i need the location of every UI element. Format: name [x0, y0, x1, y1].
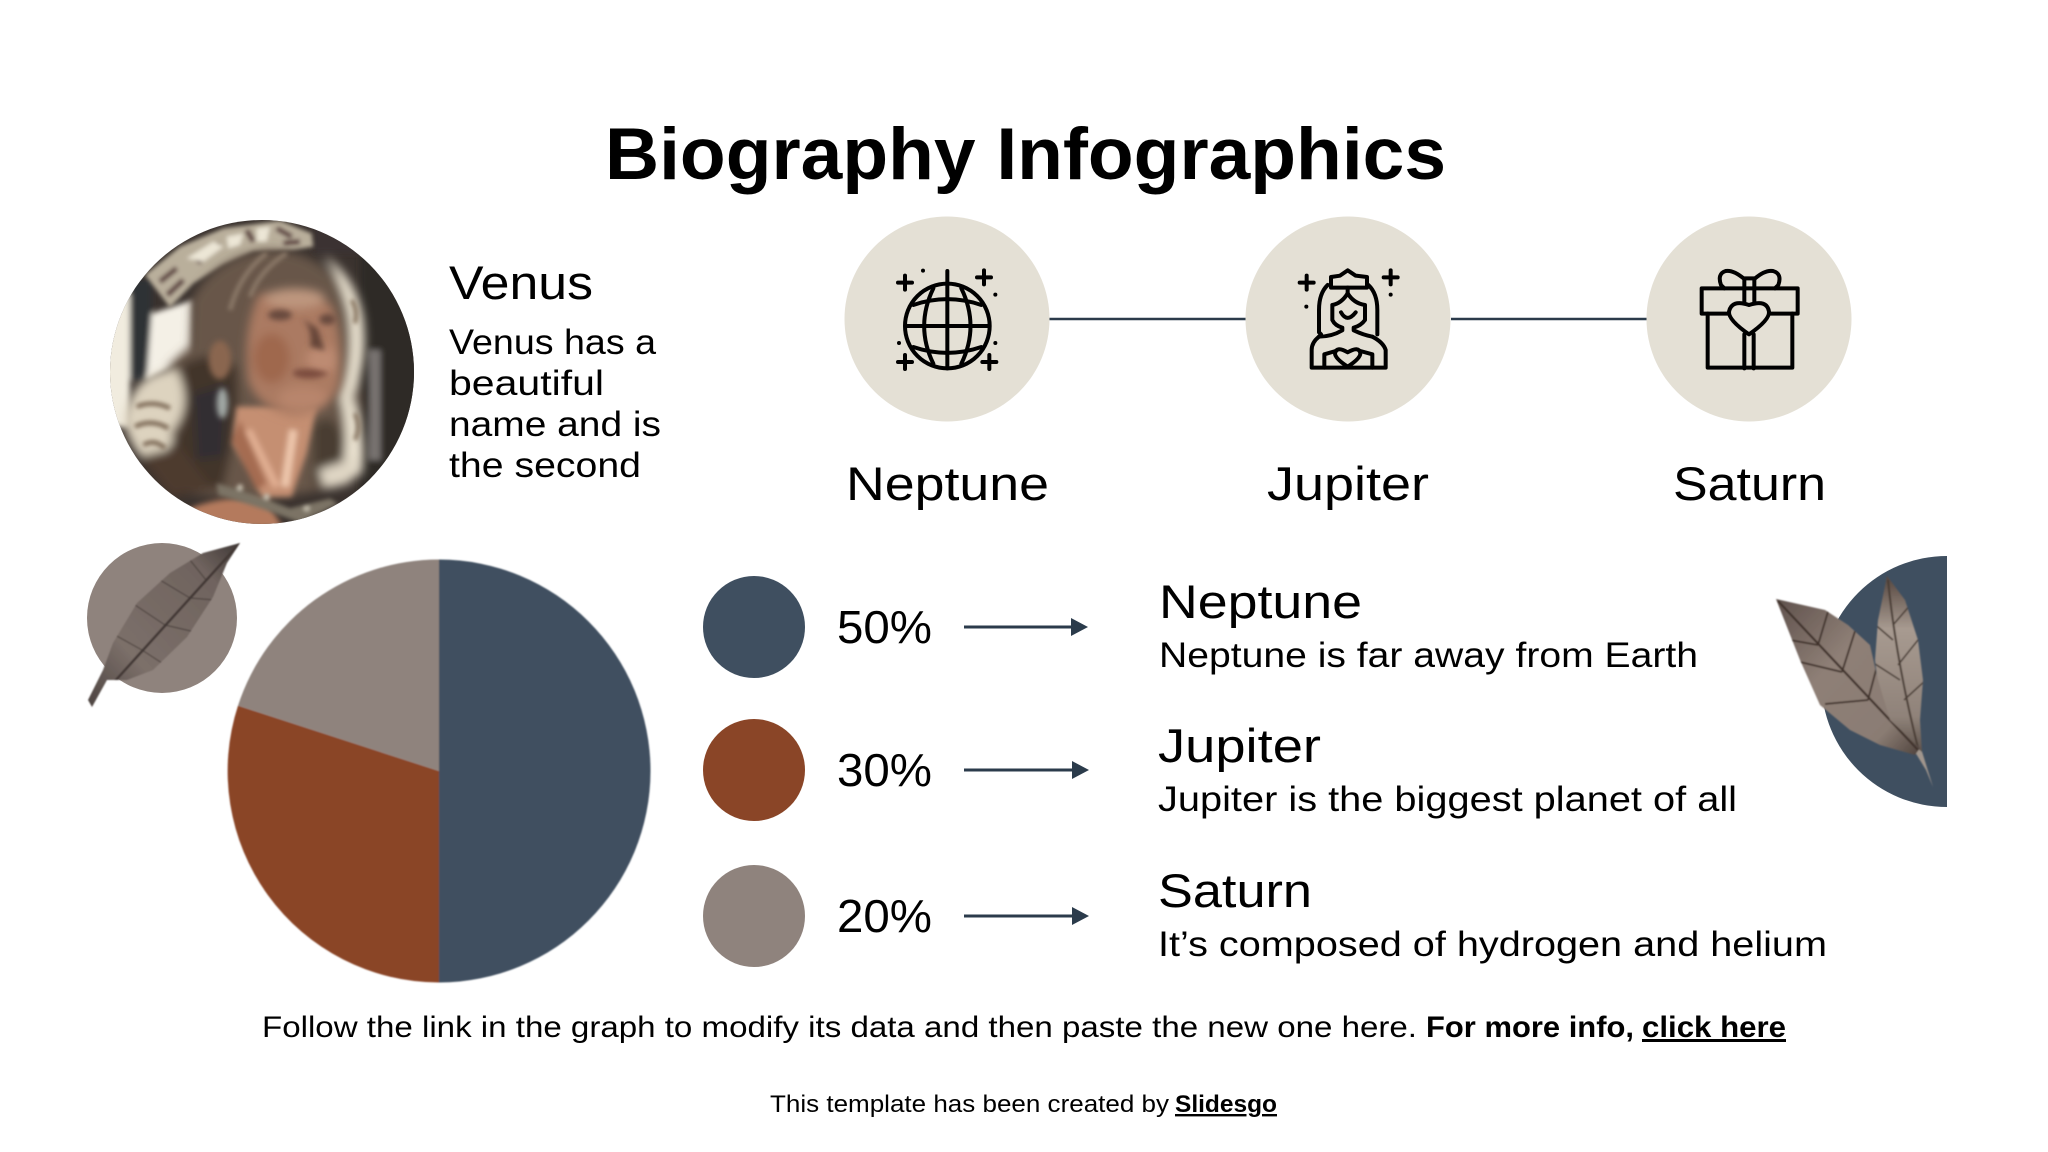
heading: Venus: Venus — [449, 256, 593, 309]
decoration: leaf on grey circle — [87, 543, 240, 707]
slice: 20% Saturn — [238, 560, 439, 771]
icon badge: gift — [1646, 216, 1852, 422]
pie chart — [228, 560, 650, 982]
photo: tiara — [145, 221, 313, 307]
photo: neck and chest — [187, 407, 317, 528]
slice: 30% Jupiter — [228, 706, 439, 982]
title: Biography Infographics — [605, 114, 1446, 195]
photo: face — [246, 288, 341, 417]
legend row: 50% Neptune: 50% — [837, 601, 932, 653]
connector: Neptune to Jupiter — [1049, 318, 1246, 320]
footnote: chart instructions: Follow the link in the graph to modify its data and then paste the new one here. — [262, 1011, 1417, 1044]
legend row: 20% Saturn: 20% — [837, 890, 932, 942]
photo: facial features — [209, 310, 335, 419]
credit line: This template has been created by — [770, 1091, 1169, 1118]
footnote: chart instructions: For more info, — [1426, 1011, 1634, 1044]
legend row: 50% Neptune: Neptune is far away from Earth — [1159, 636, 1698, 675]
icon badge: disco ball — [844, 216, 1050, 422]
label: Saturn: Saturn — [1673, 457, 1826, 510]
slice: 50% Neptune — [439, 560, 650, 982]
label: Jupiter: Jupiter — [1267, 457, 1429, 510]
legend row: 30% Jupiter: 30% — [837, 744, 932, 796]
text block: Venus description — [449, 323, 661, 485]
photo: portrait of a woman — [110, 220, 414, 524]
text block: Venus description: Venus has a — [449, 323, 657, 362]
legend row: 20% Saturn: It’s composed of hydrogen and helium — [1158, 925, 1827, 964]
photo: background — [110, 228, 414, 490]
photo: hair highlights — [135, 253, 358, 448]
legend row: 30% Jupiter — [703, 719, 1737, 821]
legend row: 20% Saturn — [703, 864, 1827, 967]
credit line: Slidesgo — [1175, 1091, 1277, 1118]
photo: hair — [123, 250, 364, 500]
icon badge: queen — [1246, 216, 1450, 422]
legend row: 50% Neptune — [703, 575, 1698, 678]
footnote: chart instructions — [262, 1011, 1786, 1044]
text block: Venus description: the second — [449, 446, 641, 485]
label: Neptune: Neptune — [846, 457, 1049, 510]
photo: necklace — [217, 483, 338, 523]
footnote: chart instructions: click here — [1642, 1011, 1786, 1044]
text block: Venus description: beautiful — [449, 364, 604, 403]
legend row: 30% Jupiter: Jupiter is the biggest planet of all — [1158, 780, 1737, 819]
legend row: 30% Jupiter: Jupiter — [1158, 719, 1321, 772]
decoration: leaves on navy half circle — [1775, 556, 1947, 807]
legend row: 20% Saturn: Saturn — [1158, 864, 1312, 917]
connector: Jupiter to Saturn — [1451, 318, 1648, 320]
text block: Venus description: name and is — [449, 405, 661, 444]
legend row: 50% Neptune: Neptune — [1159, 575, 1362, 628]
